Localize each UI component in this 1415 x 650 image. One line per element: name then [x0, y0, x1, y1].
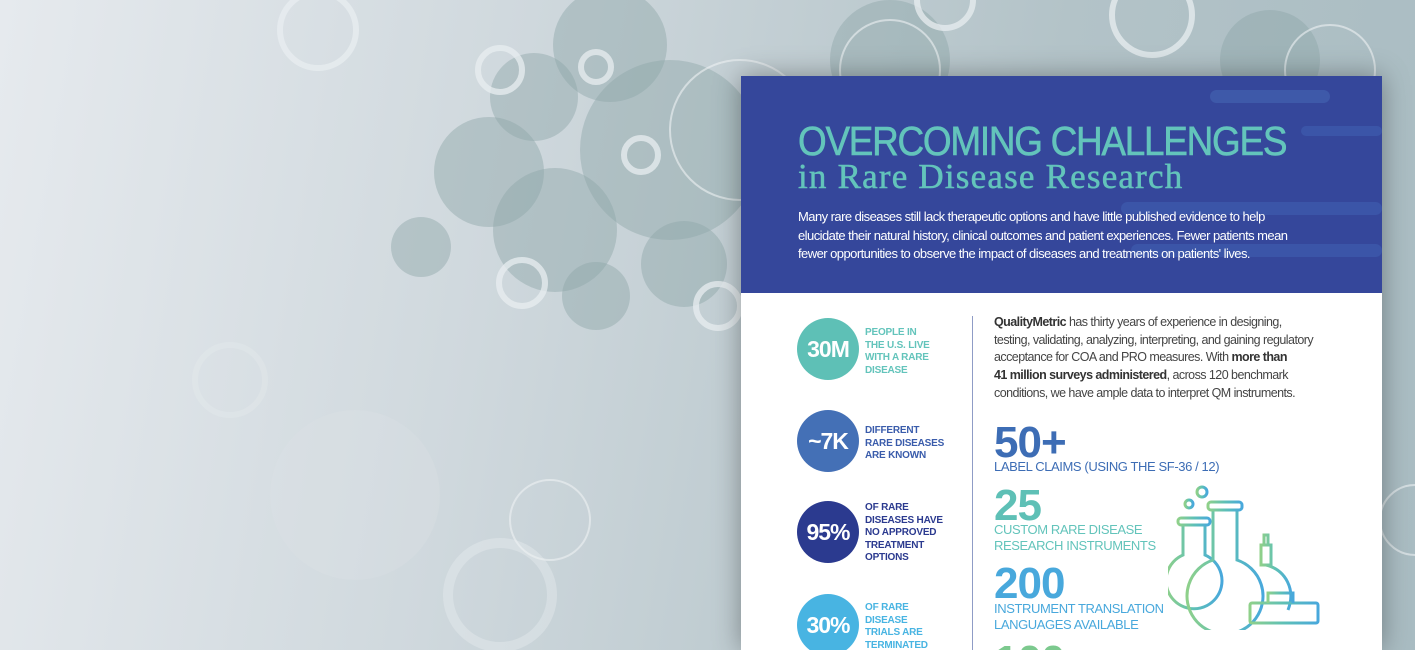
label 200: LANGUAGES AVAILABLE: [994, 617, 1138, 632]
label 30%: [865, 602, 928, 650]
label 30M: [865, 327, 930, 376]
label 95%: DISEASES HAVE: [865, 514, 943, 526]
subtitle: in Rare Disease Research: [798, 157, 1183, 196]
icon: lab flasks and microscope: [1168, 486, 1320, 630]
label 30%: TRIALS ARE: [865, 627, 923, 638]
stat: 7K: [797, 410, 859, 472]
intro text: fewer opportunities to observe the impact of diseases and treatments on patients' lives.: [798, 246, 1250, 261]
label 95%: OPTIONS: [865, 552, 909, 563]
stat: 7K: ~7K: [808, 428, 848, 454]
title: OVERCOMING CHALLENGES: [798, 118, 1286, 164]
label 30M: DISEASE: [865, 364, 908, 376]
QualityMetric text: 41 million surveys administered, across 120 benchmark: [994, 368, 1288, 382]
QualityMetric text: conditions, we have ample data to interpret QM instruments.: [994, 386, 1295, 400]
QualityMetric text: QualityMetric has thirty years of experience in designing,: [994, 315, 1282, 329]
intro text: elucidate their natural history, clinical outcomes and patient experiences. Fewer patients mean: [798, 228, 1287, 242]
label 30M: PEOPLE IN: [865, 327, 917, 338]
intro text: Many rare diseases still lack therapeutic options and have little published evidence to help: [798, 209, 1265, 224]
label 30M: THE U.S. LIVE: [865, 340, 930, 350]
label 25: RESEARCH INSTRUMENTS: [994, 538, 1156, 553]
label 30%: OF RARE: [865, 602, 909, 613]
QualityMetric text: [994, 315, 1314, 400]
label 200: INSTRUMENT TRANSLATION: [994, 601, 1164, 616]
label 95%: [865, 502, 943, 563]
label 25: CUSTOM RARE DISEASE: [994, 522, 1142, 537]
stat 50+: 50+: [994, 418, 1066, 467]
label 7K: [865, 425, 944, 461]
stat: 30M: 30M: [807, 336, 849, 362]
label 7K: DIFFERENT: [865, 425, 919, 436]
stat 200: 200: [994, 559, 1064, 608]
card: [741, 76, 1382, 650]
label 95%: NO APPROVED: [865, 527, 936, 538]
label 7K: ARE KNOWN: [865, 450, 926, 461]
label 30%: DISEASE: [865, 614, 908, 626]
header panel: [741, 76, 1382, 293]
label 30M: WITH A RARE: [865, 352, 929, 363]
QualityMetric text: testing, validating, analyzing, interpreting, and gaining regulatory: [994, 333, 1313, 347]
label 200: [994, 601, 1164, 632]
label 95%: TREATMENT: [865, 540, 924, 550]
label 7K: RARE DISEASES: [865, 438, 944, 448]
label 95%: OF RARE: [865, 502, 909, 513]
stat: 30%: 30%: [806, 612, 850, 638]
stat: 95%: [797, 501, 859, 563]
label 25: [994, 522, 1156, 553]
stat: 30%: [797, 594, 859, 650]
stat: 30M: [797, 318, 859, 380]
label 50+: LABEL CLAIMS (USING THE SF-36 / 12): [994, 459, 1219, 474]
intro text: [798, 209, 1288, 261]
QualityMetric text: acceptance for COA and PRO measures. With more than: [994, 350, 1287, 364]
stat: 95%: 95%: [806, 518, 850, 544]
stat 25: 25: [994, 481, 1041, 530]
